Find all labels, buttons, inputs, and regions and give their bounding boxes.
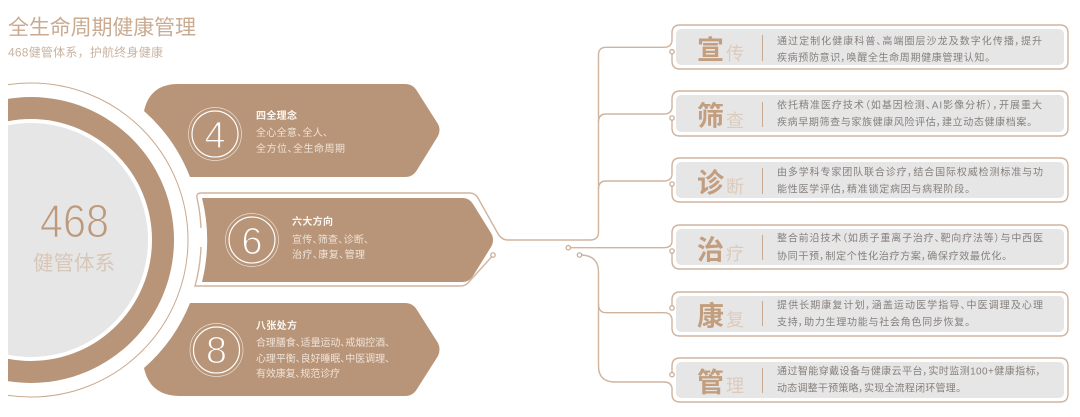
card heading: 康 xyxy=(697,302,724,332)
card: 宣传 xyxy=(670,25,1068,69)
panel heading: 四全理念 xyxy=(256,109,297,122)
card heading: 断 xyxy=(726,177,744,197)
card text: 依托精准医疗技术（如基因检测、AI影像分析），开展重大 xyxy=(777,98,1042,112)
card heading: 管 xyxy=(697,368,724,398)
card heading: 查 xyxy=(726,111,744,131)
card heading: 复 xyxy=(726,310,744,330)
card text xyxy=(777,34,1042,64)
card text: 通过智能穿戴设备与健康云平台，实时监测100+健康指标， xyxy=(777,364,1041,378)
card heading xyxy=(697,302,744,332)
card heading: 筛 xyxy=(697,102,724,132)
central number: 468 xyxy=(40,195,109,247)
panel body text xyxy=(256,126,345,155)
panel body text: 心理平衡、良好睡眠、中医调理、 xyxy=(256,352,390,365)
panel: four principles xyxy=(144,84,440,177)
card heading xyxy=(697,368,744,398)
central label: 健管体系 xyxy=(33,252,115,275)
connector lines xyxy=(195,41,672,388)
card heading: 治 xyxy=(697,236,724,266)
card text: 疾病早期筛查与家族健康风险评估，建立动态健康档案。 xyxy=(777,116,1032,128)
panel: six directions xyxy=(202,198,493,282)
card heading xyxy=(697,36,744,66)
icon: number 4 xyxy=(188,108,242,160)
card: 诊断 xyxy=(670,158,1068,202)
card text: 动态调整干预策略，实现全流程闭环管理。 xyxy=(777,382,961,394)
card text xyxy=(777,98,1042,128)
card heading xyxy=(697,168,744,198)
card text: 通过定制化健康科普、高端圈层沙龙及数字化传播，提升 xyxy=(777,34,1042,48)
card text xyxy=(777,364,1041,394)
card text: 支持，助力生理功能与社会角色同步恢复。 xyxy=(777,316,970,328)
panel body text: 全心全意、全人、 xyxy=(256,126,328,139)
panel: eight prescriptions xyxy=(144,303,440,396)
card heading: 传 xyxy=(726,44,744,64)
icon: number 8: 8 xyxy=(206,330,227,372)
card heading: 宣 xyxy=(697,36,724,66)
card: 管理 xyxy=(670,358,1068,402)
icon: number 8 xyxy=(190,324,243,376)
card text: 疾病预防意识，唤醒全生命周期健康管理认知。 xyxy=(777,51,990,64)
card heading: 理 xyxy=(726,376,744,396)
title: 全生命周期健康管理 xyxy=(8,16,196,40)
panel body text xyxy=(292,233,369,261)
card heading xyxy=(697,102,744,132)
panel body text xyxy=(256,336,390,380)
card text: 整合前沿技术（如质子重离子治疗、靶向疗法等）与中西医 xyxy=(777,232,1043,244)
panel heading: 六大方向 xyxy=(292,215,333,228)
card: 筛查 xyxy=(670,91,1068,136)
card: 康复 xyxy=(670,292,1068,336)
panel body text: 治疗、康复、管理 xyxy=(292,248,365,261)
card text xyxy=(777,166,1043,196)
card text xyxy=(777,232,1043,262)
card heading: 疗 xyxy=(726,244,744,264)
panel body text: 有效康复、规范诊疗 xyxy=(256,367,340,380)
card heading: 诊 xyxy=(697,168,725,198)
icon: number 6 xyxy=(226,214,278,266)
card text: 由多学科专家团队联合诊疗，结合国际权威检测标准与功 xyxy=(777,166,1043,178)
card text xyxy=(777,298,1043,328)
card: 治疗 xyxy=(670,225,1068,269)
card heading xyxy=(697,236,744,266)
subtitle: 468健管体系，护航终身健康 xyxy=(8,44,163,60)
central circle: 468 system xyxy=(0,83,188,397)
panel heading: 八张处方 xyxy=(256,319,297,332)
card text: 协同干预，制定个性化治疗方案，确保疗效最优化。 xyxy=(777,250,1007,262)
panel body text: 合理膳食、适量运动、戒烟控酒、 xyxy=(256,336,390,349)
icon: number 4: 4 xyxy=(204,115,226,157)
panel body text: 全方位、全生命周期 xyxy=(256,142,345,155)
card text: 提供长期康复计划，涵盖运动医学指导、中医调理及心理 xyxy=(777,298,1043,312)
icon: number 6: 6 xyxy=(241,221,263,263)
card text: 能性医学评估，精准锁定病因与病程阶段。 xyxy=(777,182,970,196)
panel body text: 宣传、筛查、诊断、 xyxy=(292,233,369,246)
